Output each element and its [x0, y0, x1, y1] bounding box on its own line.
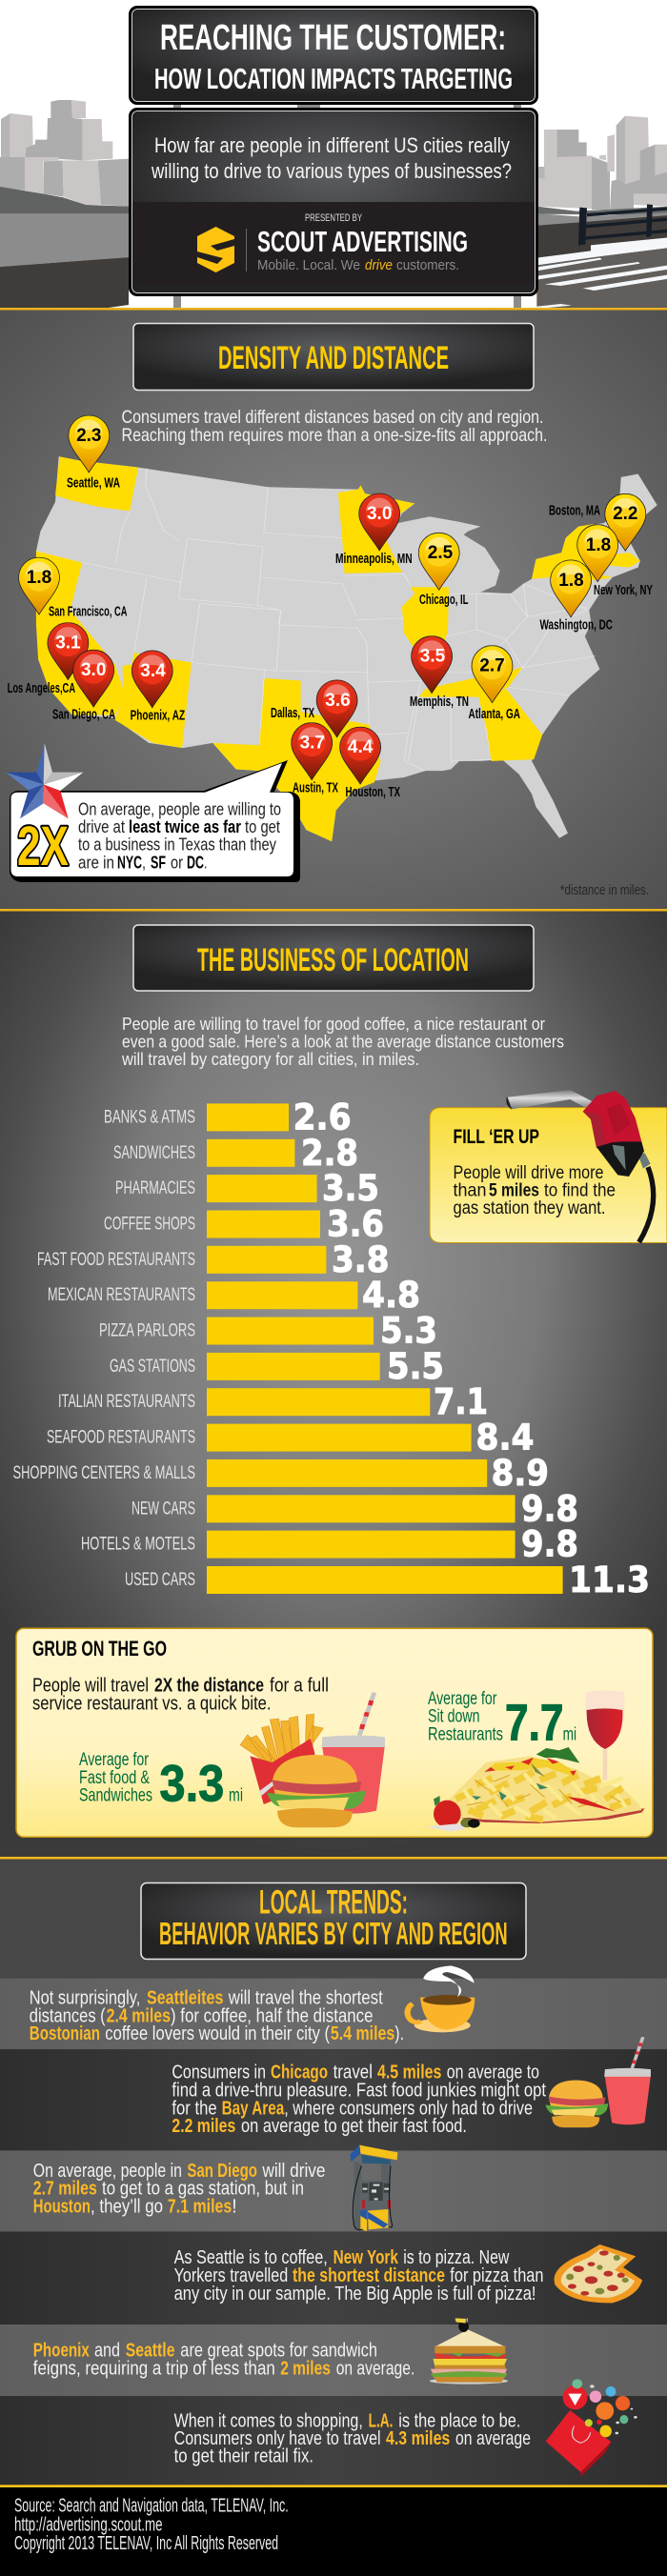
pin: New York 1.8: 1.8 [586, 535, 611, 555]
city labels: Phoenix, AZ [131, 709, 185, 724]
row text: Bay Area [222, 2097, 285, 2119]
row text: 7.1 miles [168, 2195, 232, 2217]
row text: find a drive-thru pleasure. Fast food junkies might opt [172, 2079, 546, 2101]
icon: coffee cup [408, 1965, 475, 2032]
panel text: People will drive more [454, 1163, 604, 1183]
callout text: are in [78, 852, 114, 872]
bar: gas stations: GAS STATIONS [110, 1357, 195, 1377]
row text: 2.2 miles [172, 2115, 235, 2137]
row text: will travel the shortest [228, 1986, 383, 2008]
bar: sandwiches [113, 1133, 358, 1174]
footer: source and copyright: http://advertising.scout.me [14, 2515, 162, 2536]
bar: pizza parlors [99, 1311, 437, 1351]
row text: On average, people in [33, 2160, 182, 2182]
callout text: least twice as far [129, 816, 241, 836]
panel text: service restaurant vs. a quick bite. [32, 1693, 271, 1714]
city labels: San Diego, CA [52, 707, 115, 722]
bar: shopping centers and malls: SHOPPING CENTERS & MALLS [13, 1463, 195, 1483]
stat: fast food average: Sandwiches [79, 1786, 152, 1806]
row text: Consumers only have to travel [174, 2427, 381, 2449]
stat: sit down average: Restaurants [428, 1725, 503, 1745]
row text: Phoenix [33, 2339, 90, 2361]
question text: How far are people in different US cities really [154, 133, 510, 157]
intro text: business of location: People are willing to travel for good coffee, a nice restaurant or [122, 1014, 545, 1034]
row text: , they’ll go [91, 2195, 163, 2217]
row: San Diego gas [0, 2150, 667, 2232]
gold divider above footer [0, 2485, 667, 2487]
bar: banks and ATMs: 2.6 [293, 1097, 352, 1137]
stat: fast food average: Fast food & [79, 1768, 150, 1788]
icon: Texas star [6, 743, 83, 818]
stat: sit down average: 7.7 [505, 1695, 564, 1752]
bar: shopping centers and malls [13, 1453, 549, 1494]
panel text [454, 1163, 616, 1218]
bar: fast food restaurants: FAST FOOD RESTAURANTS [37, 1250, 195, 1270]
row: L.A. shopping [0, 2396, 667, 2485]
pin: Boston 2.2: 2.2 [613, 504, 638, 524]
bar: pharmacies: 3.5 [322, 1168, 379, 1209]
pin: Los Angeles 3.1 [48, 623, 89, 680]
city labels: Atlanta, GA [469, 707, 520, 722]
pin: Seattle 2.3 [69, 415, 110, 473]
bar: italian restaurants: ITALIAN RESTAURANTS [58, 1392, 195, 1412]
intro text: business of location [121, 1014, 564, 1069]
heading: density and distance: DENSITY AND DISTANCE [218, 340, 449, 376]
highlighted states [36, 456, 640, 841]
bar: new cars: NEW CARS [131, 1499, 195, 1519]
callout text [78, 799, 281, 872]
panel text: for a full [270, 1676, 329, 1697]
row text: 4.3 miles [386, 2427, 450, 2449]
row text: travel [334, 2062, 373, 2083]
panel heading: GRUB ON THE GO [32, 1637, 167, 1660]
stat: fast food average: mi [229, 1786, 243, 1806]
tagline: drive [365, 257, 393, 273]
row text: ) for coffee, half the distance [171, 2004, 374, 2026]
pin: Austin 3.7: 3.7 [300, 734, 325, 753]
stat: sit down average: Average for [428, 1689, 497, 1709]
pin: Phoenix 3.4: 3.4 [140, 661, 166, 681]
bar: pharmacies [115, 1168, 379, 1209]
heading: local trends: LOCAL TRENDS: [259, 1883, 408, 1921]
row text: Chicago [271, 2062, 328, 2083]
bar: new cars [131, 1488, 578, 1529]
bar: banks and ATMs [104, 1097, 352, 1137]
pin: Los Angeles 3.1: 3.1 [55, 633, 81, 654]
pin: Atlanta 2.7: 2.7 [479, 655, 505, 676]
city labels: Houston, TX [345, 785, 400, 800]
row text: Consumers in [172, 2062, 266, 2083]
row text: San Diego [187, 2160, 257, 2182]
icon: club sandwich [430, 2318, 508, 2385]
bar: gas stations: 5.5 [387, 1346, 444, 1387]
US map [36, 456, 657, 841]
row text: distances ( [30, 2004, 106, 2026]
row text: on average [455, 2427, 531, 2449]
scout logo [197, 227, 234, 272]
bar: italian restaurants [58, 1381, 488, 1422]
row text: is to pizza. New [403, 2246, 510, 2268]
header background: sky [0, 0, 667, 310]
row text: feigns, requiring a trip of less than [33, 2357, 275, 2379]
icon: gas nozzle [506, 1090, 654, 1242]
pin: Dallas 3.6: 3.6 [325, 691, 351, 711]
row text: As Seattle is to coffee, [174, 2246, 328, 2268]
bar: used cars: 11.3 [569, 1560, 650, 1600]
row text: any city in our sample. The Big Apple is full of pizza! [174, 2283, 536, 2304]
footer: source and copyright: Copyright 2013 TELENAV, Inc All Rights Reserved [14, 2533, 278, 2554]
city labels: Dallas, TX [271, 706, 314, 721]
bar: new cars: 9.8 [521, 1488, 578, 1529]
stat: fast food average: Average for [79, 1750, 149, 1770]
row text: 2.4 miles [107, 2004, 171, 2026]
icon: shopping bag [546, 2379, 637, 2477]
icon: pizza [555, 2244, 642, 2303]
pin: Memphis 3.5 [412, 636, 453, 694]
panel: fill 'er up [430, 1090, 667, 1242]
icon: burger and soda [545, 2037, 651, 2127]
row text: to get their retail fix. [174, 2445, 313, 2467]
panel text: People will travel [32, 1676, 149, 1697]
footer: source and copyright [0, 2487, 667, 2576]
row text: Seattleites [147, 1986, 223, 2008]
callout text: drive at [78, 816, 125, 836]
row: Chicago fast food [0, 2049, 667, 2150]
bar: mexican restaurants [48, 1275, 420, 1316]
bar: sandwiches: SANDWICHES [113, 1143, 195, 1163]
bar: fast food restaurants: 3.8 [332, 1239, 389, 1280]
pin: Washington DC 1.8 [551, 560, 592, 617]
pin: Minneapolis 3.0: 3.0 [367, 504, 392, 524]
callout text: to get [245, 816, 280, 836]
row text [33, 2339, 414, 2379]
panel text: to find the [544, 1180, 616, 1200]
bar: coffee shops [104, 1204, 384, 1244]
bar: pizza parlors: PIZZA PARLORS [99, 1320, 195, 1341]
bar: coffee shops: 3.6 [327, 1204, 384, 1244]
pin: Seattle 2.3: 2.3 [76, 426, 102, 446]
illustration: wine and pasta plate [426, 1690, 645, 1832]
row text: to get to a gas station, but in [102, 2178, 304, 2200]
panel text: 2X the distance [154, 1676, 264, 1697]
stat: sit down average [428, 1689, 576, 1752]
row text: 2 miles [280, 2357, 331, 2379]
intro text: business of location: will travel by category for all cities, in miles. [121, 1049, 419, 1069]
pin: Atlanta 2.7 [472, 646, 513, 703]
row text: will drive [262, 2160, 326, 2182]
pin: San Diego 3.0: 3.0 [81, 660, 106, 680]
panel text: than [454, 1180, 486, 1200]
pin: Minneapolis 3.0 [359, 493, 400, 551]
question text: willing to drive to various types of businesses? [151, 159, 512, 183]
2X figure: 2X [17, 815, 69, 877]
row text: for the [172, 2097, 217, 2119]
city labels: Seattle, WA [67, 476, 120, 492]
right skyline, road and fence [529, 116, 667, 309]
callout text: to a business in Texas than they [78, 835, 277, 855]
intro text: density: Reaching them requires more than a one-size-fits all approach. [122, 425, 547, 446]
section background: business of location [0, 910, 667, 1858]
pin: Austin 3.7 [292, 723, 333, 780]
sign posts [173, 102, 521, 309]
sign: question and presenter [129, 108, 538, 296]
intro text: business of location: even a good sale. Here’s a look at the average distance customers [122, 1032, 564, 1052]
row text: and [94, 2339, 120, 2361]
pin: Phoenix 3.4 [131, 651, 172, 708]
city labels: Chicago, IL [419, 593, 469, 608]
row text: When it comes to shopping, [174, 2409, 363, 2431]
row text: are great spots for sandwich [180, 2339, 377, 2361]
panel: grub on the go [16, 1628, 653, 1837]
heading: density and distance [133, 324, 534, 391]
bar: hotels and motels: HOTELS & MOTELS [81, 1535, 195, 1555]
row text: coffee lovers would in their city ( [105, 2023, 330, 2044]
bar: sandwiches: 2.8 [301, 1133, 358, 1174]
row text: 5.4 miles [331, 2023, 394, 2044]
bar: mexican restaurants: 4.8 [362, 1275, 420, 1316]
bar: seafood restaurants: 8.4 [476, 1418, 534, 1459]
row text: ! [232, 2195, 237, 2217]
city labels [8, 476, 653, 800]
tagline: Mobile. Local. We [257, 257, 360, 273]
panel text: 5 miles [489, 1180, 539, 1200]
bar: used cars: USED CARS [125, 1570, 195, 1590]
panel text: gas station they want. [454, 1198, 606, 1218]
icon: gas pump [350, 2145, 397, 2231]
tagline: customers. [396, 257, 459, 273]
bar: gas stations [110, 1346, 444, 1387]
city labels: Minneapolis, MN [335, 552, 413, 567]
city labels: Austin, TX [293, 781, 338, 796]
row text [174, 2246, 543, 2304]
row text: 4.5 miles [377, 2062, 441, 2083]
city labels: Memphis, TN [410, 694, 469, 710]
bar: used cars [125, 1560, 650, 1600]
row text: on average to [447, 2062, 539, 2083]
row: New York pizza [0, 2232, 667, 2324]
row text: New York [334, 2246, 398, 2268]
bar: pharmacies: PHARMACIES [115, 1178, 195, 1198]
pin: San Francisco 1.8 [19, 557, 59, 614]
pin: Chicago 2.5: 2.5 [428, 543, 454, 563]
city labels: Los Angeles,CA [8, 681, 75, 696]
callout text: . [204, 852, 208, 872]
bar: coffee shops: COFFEE SHOPS [104, 1214, 195, 1235]
heading: local trends [141, 1882, 526, 1959]
row text [174, 2409, 531, 2467]
band behind logo [132, 202, 535, 283]
panel text [32, 1676, 329, 1714]
bar: mexican restaurants: MEXICAN RESTAURANTS [48, 1285, 195, 1305]
bar: shopping centers and malls: 8.9 [492, 1453, 549, 1494]
illustration: fries, drink and burger [240, 1693, 385, 1827]
pin: Houston 4.4: 4.4 [348, 737, 374, 757]
bar chart: distance by category [13, 1097, 650, 1600]
row text: ). [394, 2023, 404, 2044]
section background: local trends [0, 1858, 667, 1979]
row text [33, 2160, 326, 2217]
callout text: DC [187, 852, 204, 872]
row text: L.A. [369, 2409, 393, 2431]
row text [30, 1986, 404, 2044]
row text: is the place to be. [398, 2409, 520, 2431]
row text: Not surprisingly, [30, 1986, 140, 2008]
pin: San Diego 3.0 [73, 650, 114, 707]
intro text: density [122, 407, 547, 446]
row text: Yorkers travelled [174, 2264, 288, 2286]
pin: Washington DC 1.8: 1.8 [558, 571, 584, 591]
pin: New York 1.8 [577, 525, 618, 582]
section background: density and distance [0, 309, 667, 911]
title line 1: REACHING THE CUSTOMER: [160, 18, 506, 58]
row text [172, 2062, 546, 2137]
stat: fast food average [79, 1750, 243, 1813]
pin: Chicago 2.5 [418, 533, 459, 590]
bar: seafood restaurants [47, 1418, 534, 1459]
pin: Boston 2.2 [605, 493, 646, 551]
scout advertising wordmark: SCOUT ADVERTISING [257, 225, 468, 258]
bar: fast food restaurants [37, 1239, 389, 1280]
bar: banks and ATMs: BANKS & ATMS [104, 1107, 195, 1127]
row text: Houston [33, 2195, 91, 2217]
left skyline and road [0, 100, 129, 309]
row text: on average. [336, 2357, 414, 2379]
callout text: NYC [117, 852, 142, 872]
bar: hotels and motels: 9.8 [521, 1524, 578, 1565]
row text: on average to get their fast food. [241, 2115, 467, 2137]
row text: Seattle [126, 2339, 175, 2361]
bar: italian restaurants: 7.1 [434, 1381, 488, 1422]
bar: seafood restaurants: SEAFOOD RESTAURANTS [47, 1428, 195, 1448]
city labels: Washington, DC [539, 618, 613, 634]
callout text: , [142, 852, 146, 872]
stat: sit down average: Sit down [428, 1707, 480, 1727]
footer: source and copyright: Source: Search and Navigation data, TELENAV, Inc. [14, 2496, 289, 2517]
question text [151, 133, 512, 183]
pin: Houston 4.4 [340, 727, 381, 784]
panel heading: FILL ‘ER UP [454, 1126, 539, 1148]
row text: the shortest distance [293, 2264, 445, 2286]
bar: hotels and motels [81, 1524, 578, 1565]
city labels: San Francisco, CA [49, 605, 128, 620]
callout text: SF [151, 852, 166, 872]
row text: 2.7 miles [33, 2178, 97, 2200]
row text: for pizza than [450, 2264, 543, 2286]
row text: , where consumers only had to drive [284, 2097, 533, 2119]
pin: Dallas 3.6 [316, 680, 357, 737]
presented by: PRESENTED BY [305, 212, 362, 224]
intro text: density: Consumers travel different distances based on city and region. [122, 407, 543, 428]
pin: Memphis 3.5: 3.5 [420, 646, 446, 667]
pin: San Francisco 1.8: 1.8 [27, 568, 51, 588]
callout text: On average, people are willing to [78, 799, 281, 819]
city labels: Boston, MA [549, 503, 600, 518]
stat: sit down average: mi [563, 1725, 576, 1745]
bar: pizza parlors: 5.3 [380, 1311, 437, 1351]
sign: main title [129, 6, 538, 105]
callout text: or [171, 852, 183, 872]
heading: the business of location: THE BUSINESS OF LOCATION [197, 942, 469, 978]
row: Seattle coffee [0, 1979, 667, 2049]
stat: fast food average: 3.3 [159, 1756, 224, 1813]
row: Phoenix and Seattle sandwiches [0, 2324, 667, 2396]
row text: Bostonian [30, 2023, 100, 2044]
heading: the business of location [133, 925, 534, 991]
callout: twice as far in Texas [6, 743, 300, 882]
